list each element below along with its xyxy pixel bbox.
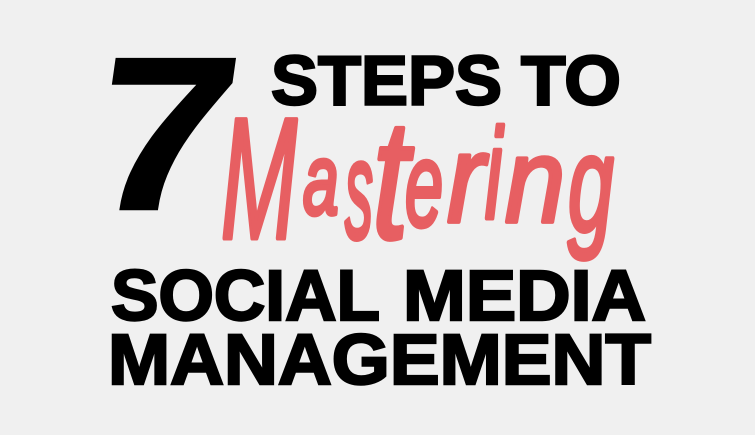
script word: mastering: M — [221, 83, 297, 275]
heading: social media: SOCIAL — [111, 257, 380, 336]
heading: social media: MEDIA — [403, 257, 646, 336]
heading: steps to: STEPS — [271, 42, 502, 120]
script word: mastering: g — [568, 107, 614, 260]
heading: steps to — [271, 42, 621, 120]
script word: mastering: e — [405, 118, 443, 252]
script word: mastering: a — [303, 123, 339, 235]
script word: mastering: r — [447, 110, 489, 249]
script word: mastering: t — [372, 85, 414, 275]
heading: management: MANAGEMENT — [108, 321, 651, 400]
heading: social media — [111, 257, 646, 336]
heading: steps to: TO — [521, 42, 621, 120]
script word: mastering — [221, 83, 614, 275]
numeral 7: 7 — [79, 11, 252, 255]
script word: mastering: i — [485, 103, 504, 246]
script word: mastering: s — [345, 111, 373, 268]
script word: mastering: n — [505, 115, 565, 248]
